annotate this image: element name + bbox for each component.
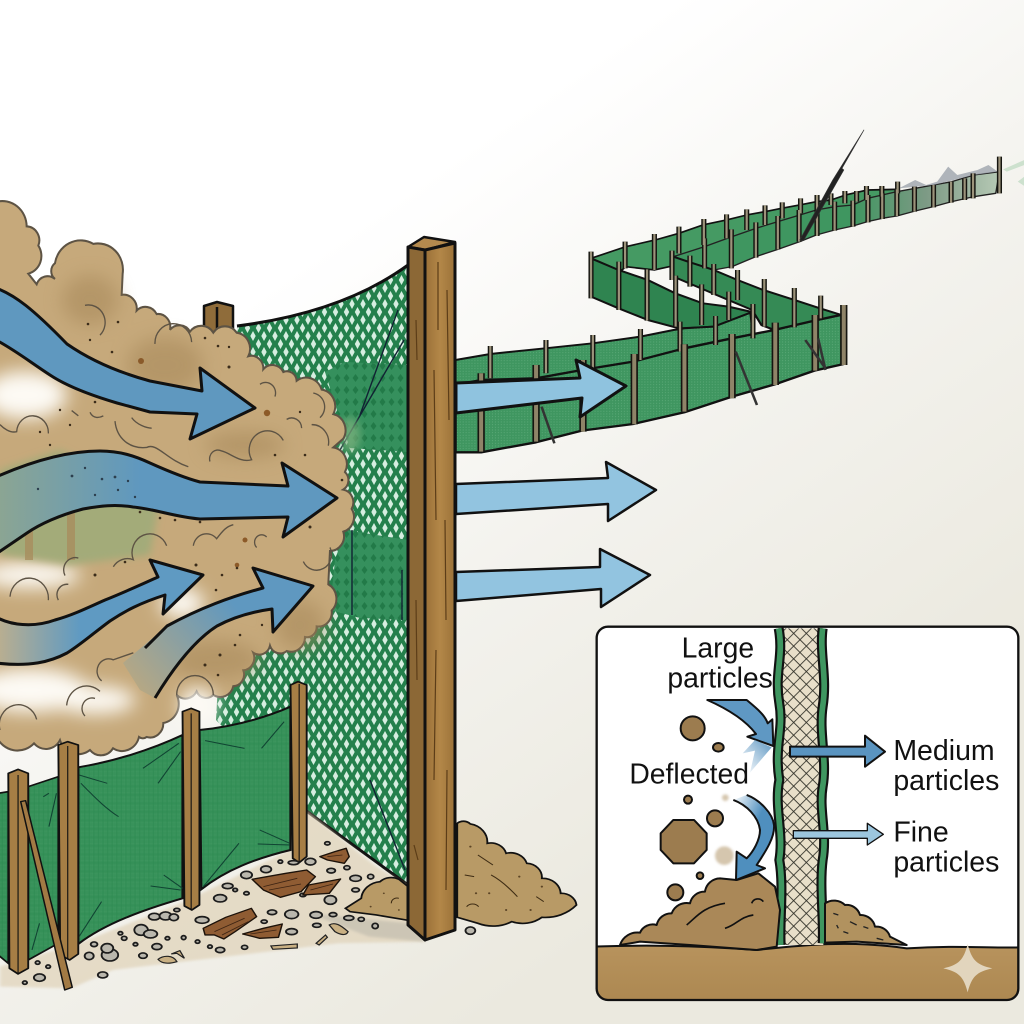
label: deflected: Deflected [629, 758, 749, 790]
dark middle fence run left [591, 258, 752, 328]
soil pile left of post [345, 878, 410, 921]
inset panel: particle filtering cross-section [590, 627, 1023, 1007]
falling rocks [661, 716, 724, 900]
low fence post 2 [58, 742, 78, 960]
fence posts [481, 157, 999, 452]
net top edge [237, 265, 408, 326]
cloud body [0, 201, 354, 755]
winding windbreak fence in the distance [455, 130, 1024, 452]
large soil pile [620, 873, 780, 950]
soil marks [391, 855, 544, 907]
post ground shadow [309, 913, 425, 942]
light mesh [216, 265, 408, 885]
ghost fence posts [29, 490, 71, 560]
upper fence back run [591, 189, 897, 297]
dark mesh band upper [325, 362, 408, 452]
wind arrow entering cloud 4 [123, 568, 313, 698]
main timber post [408, 237, 455, 940]
broken wood planks [203, 848, 349, 939]
soil specks [370, 846, 543, 911]
post top [408, 237, 455, 250]
low fence post 4 [291, 682, 307, 863]
large particle arrow [707, 700, 773, 746]
net tie lines [340, 310, 405, 870]
cloud shading [62, 275, 325, 680]
label: fine particles: particles [893, 847, 999, 879]
deflection flare [743, 740, 772, 773]
wind arrow entering cloud 3 [0, 560, 203, 664]
rear lower fence band [455, 313, 754, 390]
fence fading tail [1003, 160, 1024, 186]
fabric creases [32, 722, 290, 950]
wind arrow entering cloud 2 [0, 451, 337, 554]
fence braces [542, 338, 825, 443]
label: medium particles: particles [893, 765, 999, 797]
cloud billow lines [0, 305, 332, 730]
post front face [425, 243, 455, 940]
right mesh strip [821, 628, 824, 943]
post left face [408, 247, 425, 940]
tall mesh net panel [216, 265, 408, 885]
ground debris zone and low fence [0, 682, 576, 990]
label: fine particles: Fine [893, 817, 949, 849]
ground shadow [0, 810, 425, 988]
sparkle mark [943, 944, 992, 992]
dust specks [37, 321, 343, 676]
diagonal brace [21, 801, 72, 990]
ghost fence seen through dust [0, 450, 160, 565]
upper fence front run [673, 172, 999, 277]
label: large particles: particles [667, 663, 773, 695]
plank grain [214, 855, 342, 935]
dark mesh band lower [330, 530, 408, 620]
distant grey scrub [899, 165, 998, 188]
long diagonal stake [800, 130, 864, 241]
cloud gaps [0, 371, 216, 724]
soil pile right of post [457, 821, 576, 926]
faded rocks passing [715, 794, 734, 865]
mesh core [782, 628, 823, 945]
dark middle fence run right [673, 257, 841, 330]
air outflow arrow bottom [456, 549, 650, 607]
inset ground [598, 942, 1018, 999]
inset card [597, 627, 1018, 1000]
air outflow arrow middle [456, 462, 656, 521]
fine particle arrow [793, 823, 883, 845]
front lower fence band [455, 314, 844, 452]
label: medium particles: Medium [893, 735, 995, 767]
wood grain [414, 262, 449, 890]
left mesh strip [778, 628, 781, 945]
inset border [597, 627, 1018, 1000]
fine soil pile [825, 901, 907, 945]
low fence panel right [199, 707, 291, 889]
low fence post 3 [183, 708, 199, 910]
deflected arrow [733, 795, 774, 880]
tan pebbles [158, 924, 348, 963]
low fence panel left [0, 777, 58, 963]
wind particle specks on arrow 2 [37, 467, 136, 498]
label: large particles: Large [682, 633, 754, 665]
medium particle arrow [790, 736, 885, 767]
wind arrow entering cloud 1 [0, 288, 255, 439]
net bottom edge [305, 810, 408, 885]
air outflow arrow top [456, 360, 626, 417]
dust cloud [0, 201, 354, 755]
stones [23, 842, 475, 984]
low fence panel middle [78, 735, 183, 944]
cloud edge glow on net [340, 417, 360, 453]
low fence post 1 [8, 769, 28, 974]
rear post stub [204, 302, 233, 340]
